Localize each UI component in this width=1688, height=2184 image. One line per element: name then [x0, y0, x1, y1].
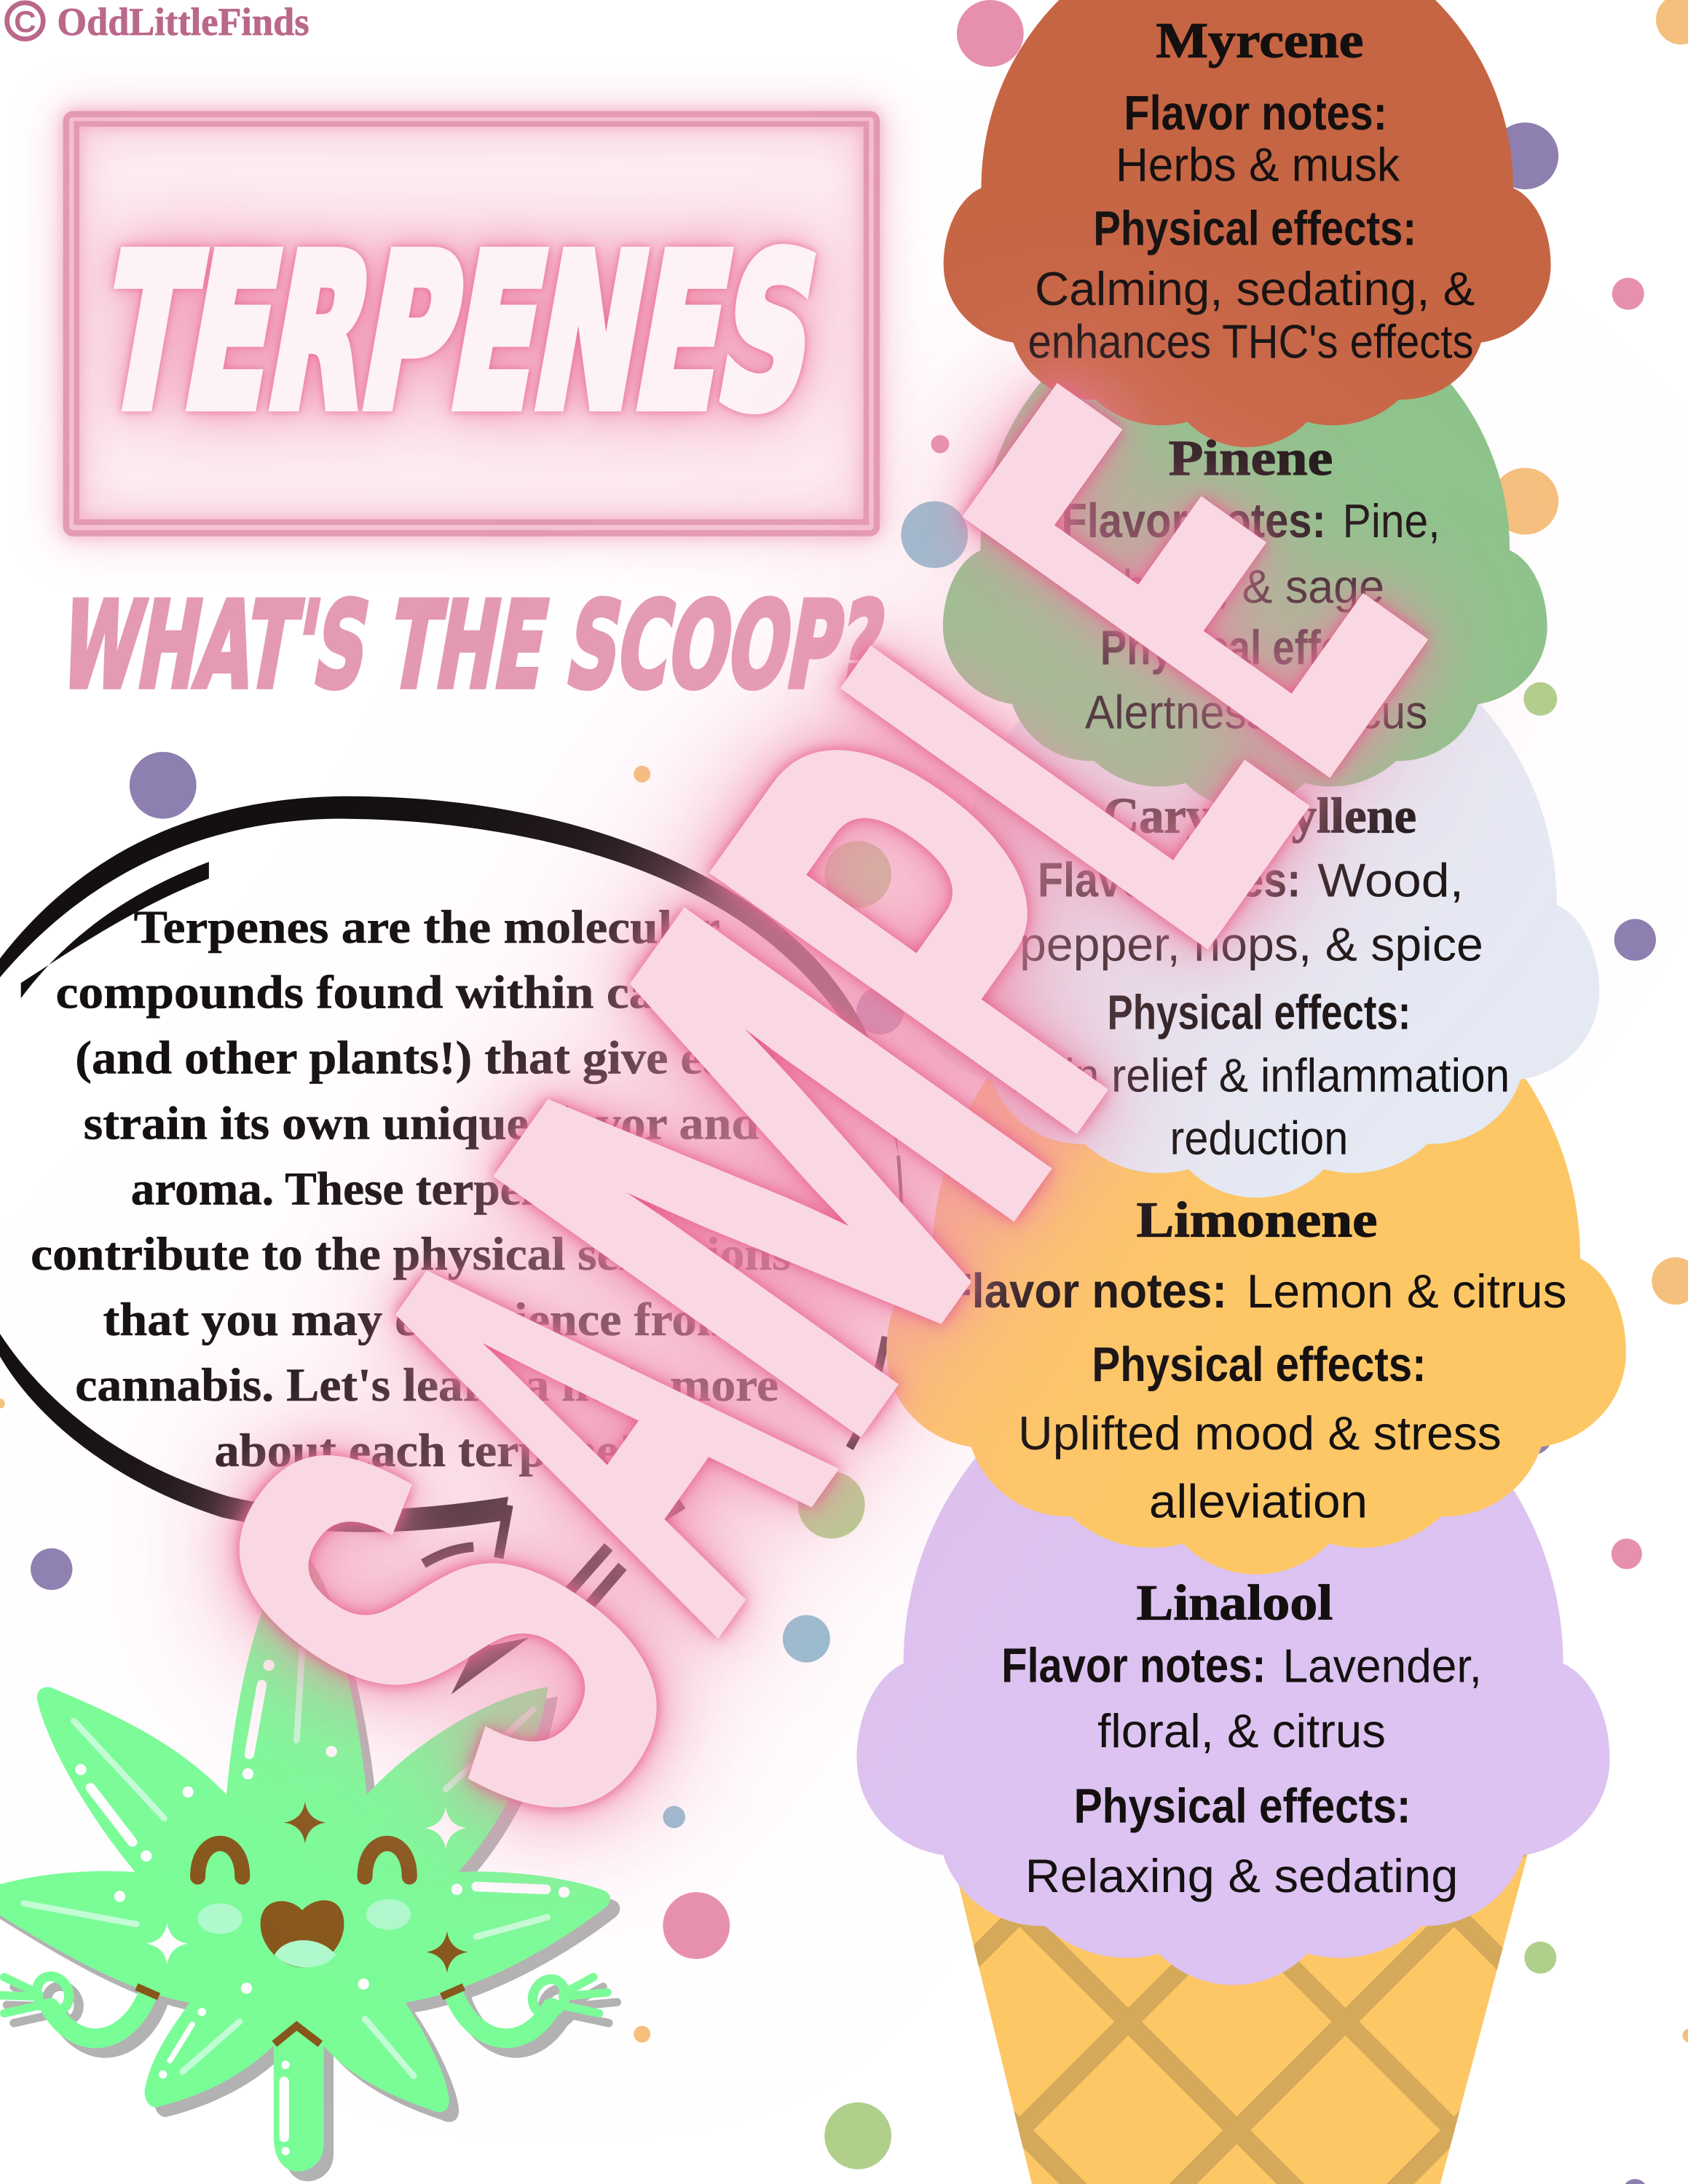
- mouth: [261, 1900, 344, 1967]
- watermark: SAMPLE: A: [238, 1125, 950, 1720]
- title frame: double pink border: [66, 114, 877, 534]
- glossy highlights: [90, 1685, 546, 2137]
- mascot: smiling cannabis leaf meditating: [0, 1546, 619, 2180]
- intro paragraph: about each terpene!: [215, 1425, 635, 1477]
- waffle lattice: [973, 1855, 1526, 2184]
- scoop heading: Myrcene: [1156, 12, 1363, 68]
- logo: OddLittleFinds copyright: OddLittleFinds: [57, 0, 309, 44]
- black hand-drawn circle around intro text: [0, 796, 902, 1695]
- scoop: Pinene (green): [943, 286, 1547, 808]
- intro paragraph: strain its own unique flavor and: [84, 1097, 759, 1150]
- ice cream cone: [958, 1854, 1528, 2184]
- watermark: SAMPLE: L: [718, 460, 1423, 1042]
- sparkles white: [146, 1807, 467, 1965]
- physical effects: Calming, sedating, &: [1035, 262, 1475, 315]
- flavor notes: [944, 1264, 1567, 1318]
- scoop: Caryophyllene (pale blue): [913, 604, 1599, 1198]
- physical effects: Physical effects:: [1074, 1779, 1411, 1834]
- flavor notes: basil, & sage: [1123, 560, 1384, 613]
- scoop heading: Linalool: [1137, 1575, 1333, 1630]
- physical effects: Physical effects:: [1100, 620, 1413, 675]
- intro paragraph: aroma. These terpenes also: [131, 1163, 678, 1215]
- physical effects: [1028, 202, 1475, 368]
- arm cuffs and stem notch: [136, 1987, 464, 2044]
- subtitle: What's the scoop?: WHAT'S THE SCOOP?: [52, 577, 894, 714]
- scoop: Limonene (orange): [886, 935, 1626, 1575]
- physical effects: Pain relief & inflammation: [1011, 1048, 1510, 1101]
- watermark: SAMPLE: S: [87, 1327, 806, 1932]
- physical effects: Physical effects:: [1092, 1337, 1426, 1392]
- watermark: SAMPLE: E: [841, 292, 1542, 869]
- watermark: SAMPLE: P: [587, 623, 1307, 1228]
- physical effects: Physical effects:: [1093, 202, 1416, 256]
- logo: OddLittleFinds copyright: C: [14, 4, 36, 39]
- intro paragraph: that you may experience from: [103, 1294, 738, 1346]
- flavor notes: Flavor notes:: [1038, 853, 1301, 908]
- scoop heading: Pinene: [1169, 430, 1333, 486]
- intro paragraph: contribute to the physical sensations: [31, 1228, 791, 1281]
- flavor notes: [1019, 853, 1483, 971]
- flavor notes: Wood,: [1317, 854, 1464, 907]
- physical effects: [1011, 985, 1510, 1164]
- physical effects: Alertness & focus: [1085, 685, 1427, 738]
- scoop: Myrcene (terracotta): [944, 0, 1551, 447]
- flavor notes: [1061, 494, 1440, 613]
- scoop: Linalool (purple): [857, 1334, 1610, 1985]
- physical effects: Physical effects:: [1107, 985, 1411, 1040]
- leaf shadow: [0, 1555, 619, 2180]
- sparkles brown: [284, 1802, 468, 1973]
- flavor notes: [1001, 1638, 1482, 1757]
- scoop heading: Caryophyllene: [1103, 788, 1416, 844]
- flavor notes: Lavender,: [1282, 1639, 1482, 1692]
- physical effects: alleviation: [1149, 1475, 1368, 1528]
- flavor notes: Herbs & musk: [1116, 138, 1400, 191]
- flavor notes: pepper, hops, & spice: [1019, 918, 1483, 971]
- flavor notes: floral, & citrus: [1097, 1704, 1386, 1757]
- intro paragraph: compounds found within cannabis: [56, 967, 798, 1019]
- flavor notes: Flavor notes:: [1124, 86, 1387, 141]
- leaf body: [0, 1546, 610, 2171]
- white dots on leaf: [75, 1660, 569, 2156]
- flavor notes: [1116, 86, 1400, 191]
- physical effects: [1085, 620, 1427, 738]
- scoop heading: Limonene: [1137, 1192, 1378, 1247]
- physical effects: Uplifted mood & stress: [1018, 1406, 1502, 1460]
- intro paragraph: [31, 901, 798, 1477]
- flavor notes: Flavor notes:: [1001, 1638, 1266, 1693]
- cheeks: [198, 1899, 411, 1934]
- flavor notes: Flavor notes:: [944, 1264, 1227, 1318]
- title: TERPENES: TERPENES: [87, 212, 835, 454]
- intro paragraph: Terpenes are the molecular: [134, 901, 720, 954]
- physical effects: enhances THC's effects: [1028, 315, 1473, 368]
- physical effects: Relaxing & sedating: [1025, 1849, 1458, 1902]
- flavor notes: Lemon & citrus: [1247, 1265, 1567, 1318]
- flavor notes: Flavor notes:: [1061, 494, 1326, 548]
- physical effects: reduction: [1170, 1111, 1348, 1164]
- intro paragraph: (and other plants!) that give each: [75, 1032, 777, 1085]
- title panel tint: [76, 124, 867, 522]
- intro paragraph: cannabis. Let's learn a little more: [75, 1359, 778, 1412]
- tongue: [275, 1940, 336, 1967]
- physical effects: [1025, 1779, 1458, 1902]
- physical effects: [1018, 1337, 1502, 1528]
- eyes: [198, 1843, 409, 1877]
- watermark: SAMPLE: [87, 292, 1542, 1932]
- watermark: SAMPLE: M: [367, 807, 1177, 1537]
- flavor notes: Pine,: [1343, 494, 1440, 547]
